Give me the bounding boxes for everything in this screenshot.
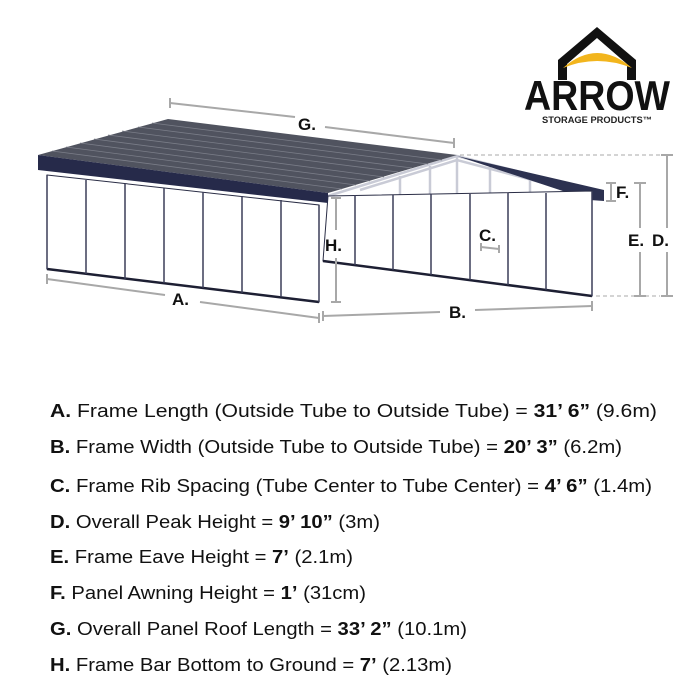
- logo: Arrow Storage Products: [524, 27, 670, 125]
- carport drawing: [38, 119, 604, 302]
- right side wall: [323, 191, 592, 296]
- specifications list: F. Panel Awning Height = 1’ (31cm): [50, 583, 366, 603]
- specifications list: A. Frame Length (Outside Tube to Outside Tube) = 31’ 6” (9.6m): [50, 401, 657, 421]
- dimension labels: G.: [298, 115, 316, 134]
- dimension labels: A.: [172, 290, 189, 309]
- roof: [38, 119, 457, 193]
- dimension labels: D.: [652, 231, 669, 250]
- A dimension: [47, 279, 165, 295]
- icon: yellow arc: [563, 53, 632, 68]
- dimension labels: H.: [325, 236, 342, 255]
- E dimension: [639, 183, 641, 228]
- icon: house chevron: [558, 27, 636, 80]
- specifications list: E. Frame Eave Height = 7’ (2.1m): [50, 547, 353, 567]
- dimension labels: E.: [628, 231, 644, 250]
- B dimension: [323, 312, 440, 316]
- specifications list: C. Frame Rib Spacing (Tube Center to Tube Center) = 4’ 6” (1.4m): [50, 476, 652, 496]
- dimension labels: C.: [479, 226, 496, 245]
- C dimension: [481, 247, 499, 249]
- dimension labels: F.: [616, 183, 629, 202]
- logo text: ARROW: [524, 72, 670, 119]
- H dimension: [335, 198, 337, 230]
- specifications list: [50, 401, 657, 675]
- G dimension: [170, 103, 295, 117]
- logo: Arrow Storage Products: STORAGE PRODUCTS™: [542, 115, 652, 125]
- left side wall: [47, 175, 319, 302]
- D dimension: [666, 155, 668, 228]
- specifications list: B. Frame Width (Outside Tube to Outside Tube) = 20’ 3” (6.2m): [50, 437, 622, 457]
- dimension labels: [172, 115, 669, 322]
- specifications list: G. Overall Panel Roof Length = 33’ 2” (10.1m): [50, 619, 467, 639]
- right gable end frame: [328, 156, 600, 196]
- dimension labels: B.: [449, 303, 466, 322]
- F dimension: [610, 183, 612, 201]
- specifications list: D. Overall Peak Height = 9’ 10” (3m): [50, 512, 380, 532]
- specifications list: H. Frame Bar Bottom to Ground = 7’ (2.13m): [50, 655, 452, 675]
- dimension lines: [47, 98, 673, 323]
